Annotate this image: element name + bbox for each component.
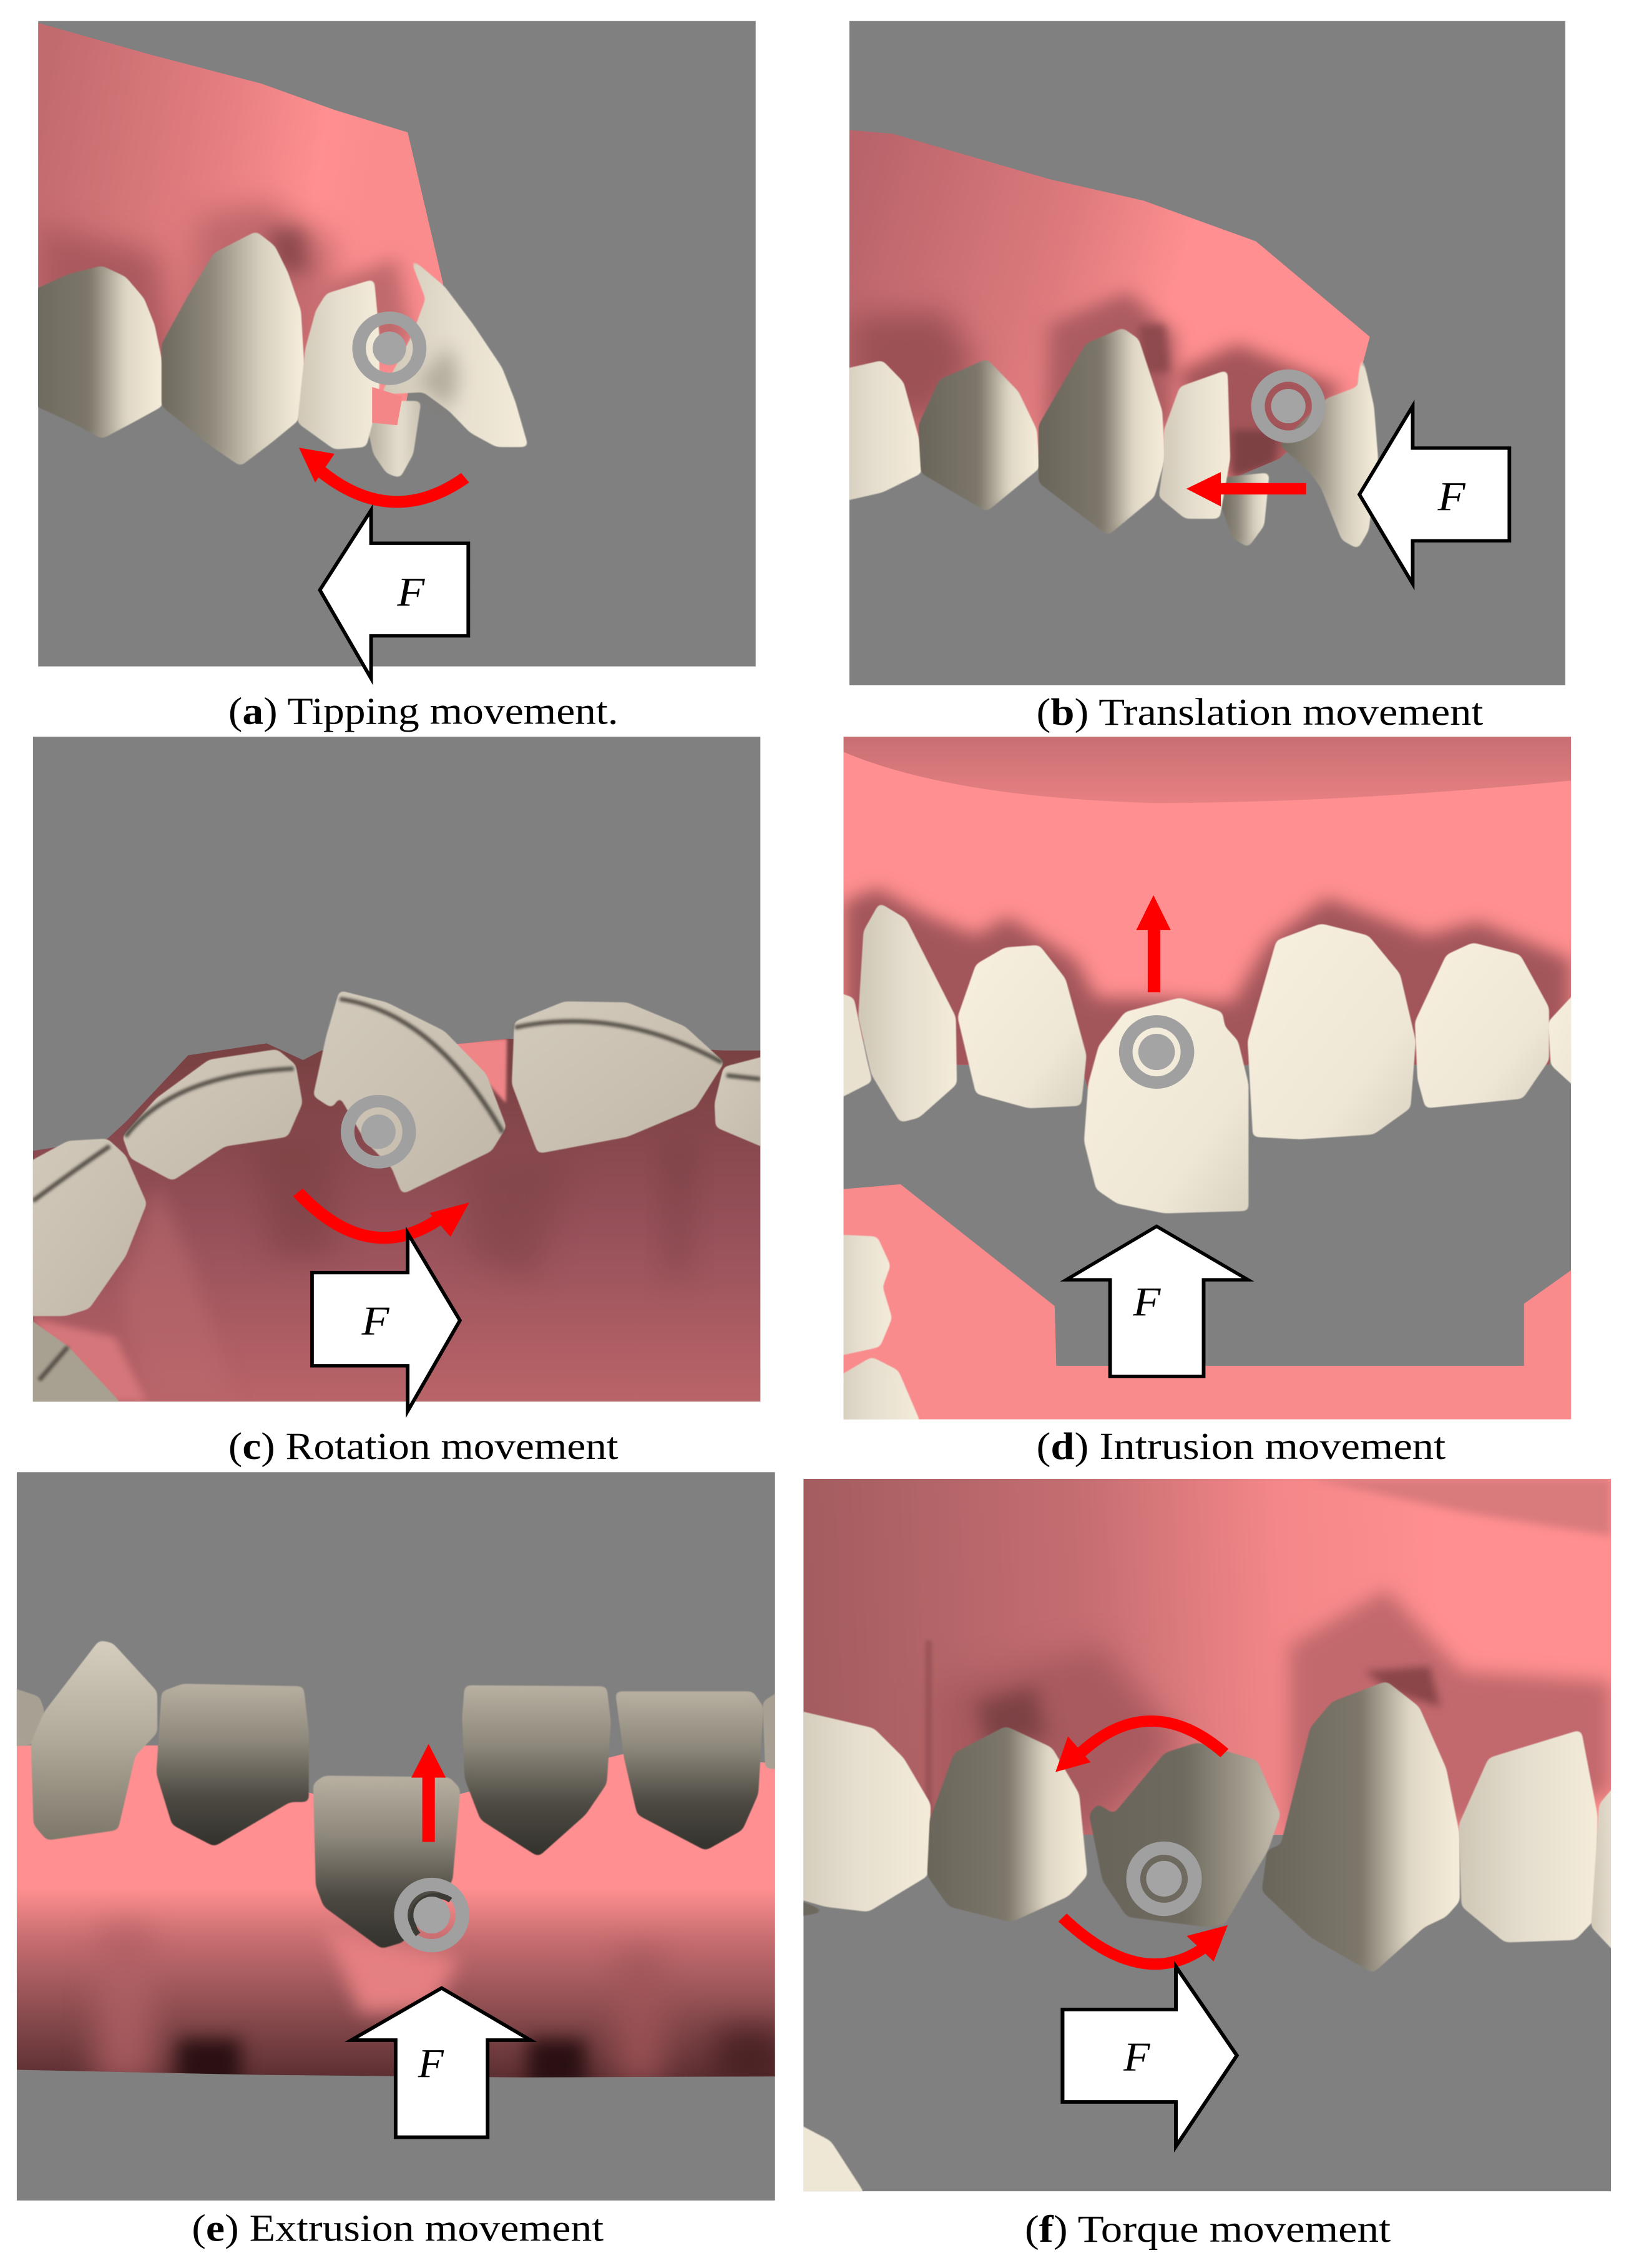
illustration: rotated tooth, occlusal view	[11, 737, 784, 1428]
illustration: torqued tooth on gum	[782, 1479, 1635, 2213]
arrow: applied force F	[1066, 1226, 1248, 1377]
illustration: tipped tooth on gum	[16, 21, 756, 667]
arrow: applied force F: F	[418, 2041, 444, 2087]
arrow: red upward intrusion direction	[1136, 895, 1171, 992]
arrow: applied force F	[1062, 1966, 1237, 2146]
caption b: (b) Translation movement	[1037, 691, 1484, 733]
arrow: red upper torque arc	[1055, 1721, 1225, 1772]
icon: centre of resistance ring	[1258, 376, 1319, 436]
icon: centre of resistance ring	[359, 318, 419, 379]
panel: (f) torque movement	[782, 1479, 1635, 2251]
caption f: (f) Torque movement	[1025, 2208, 1391, 2251]
caption d: (d) Intrusion movement	[1037, 1425, 1446, 1467]
panel: (c) rotation movement	[11, 737, 784, 1467]
arrow: applied force F	[320, 510, 468, 679]
panel: (b) translation movement	[830, 21, 1565, 733]
arrow: red lower torque arc	[1062, 1918, 1228, 1964]
panel: (d) intrusion movement	[824, 737, 1593, 1467]
arrow: applied force F: F	[396, 569, 425, 615]
icon: centre of resistance ring	[401, 1884, 462, 1946]
icon: centre of resistance ring	[348, 1101, 409, 1162]
icon: centre of resistance ring	[1133, 1848, 1195, 1910]
illustration: extruded lower incisor	[0, 1472, 795, 2201]
arrow: red curved tipping direction	[299, 448, 465, 502]
arrow: red curved rotation direction	[298, 1192, 469, 1238]
arrow: applied force F	[351, 1988, 531, 2137]
caption a: (a) Tipping movement.	[228, 690, 619, 732]
arrow: applied force F: F	[361, 1298, 389, 1343]
arrow: red upward extrusion direction	[411, 1744, 446, 1842]
panel: (e) extrusion movement	[0, 1472, 795, 2249]
arrow: red translation direction	[1186, 472, 1306, 506]
panel: (a) tipping movement	[16, 21, 756, 732]
icon: centre of resistance ring	[1126, 1021, 1188, 1082]
caption e: (e) Extrusion movement	[192, 2207, 604, 2249]
caption c: (c) Rotation movement	[228, 1425, 619, 1467]
arrow: applied force F: F	[1437, 474, 1465, 519]
illustration: intruded incisor, frontal view	[824, 737, 1593, 1442]
arrow: applied force F	[312, 1233, 460, 1411]
illustration: translated tooth on gum	[830, 21, 1565, 685]
arrow: applied force F	[1359, 406, 1509, 584]
arrow: applied force F: F	[1123, 2035, 1150, 2080]
arrow: applied force F: F	[1132, 1279, 1161, 1325]
